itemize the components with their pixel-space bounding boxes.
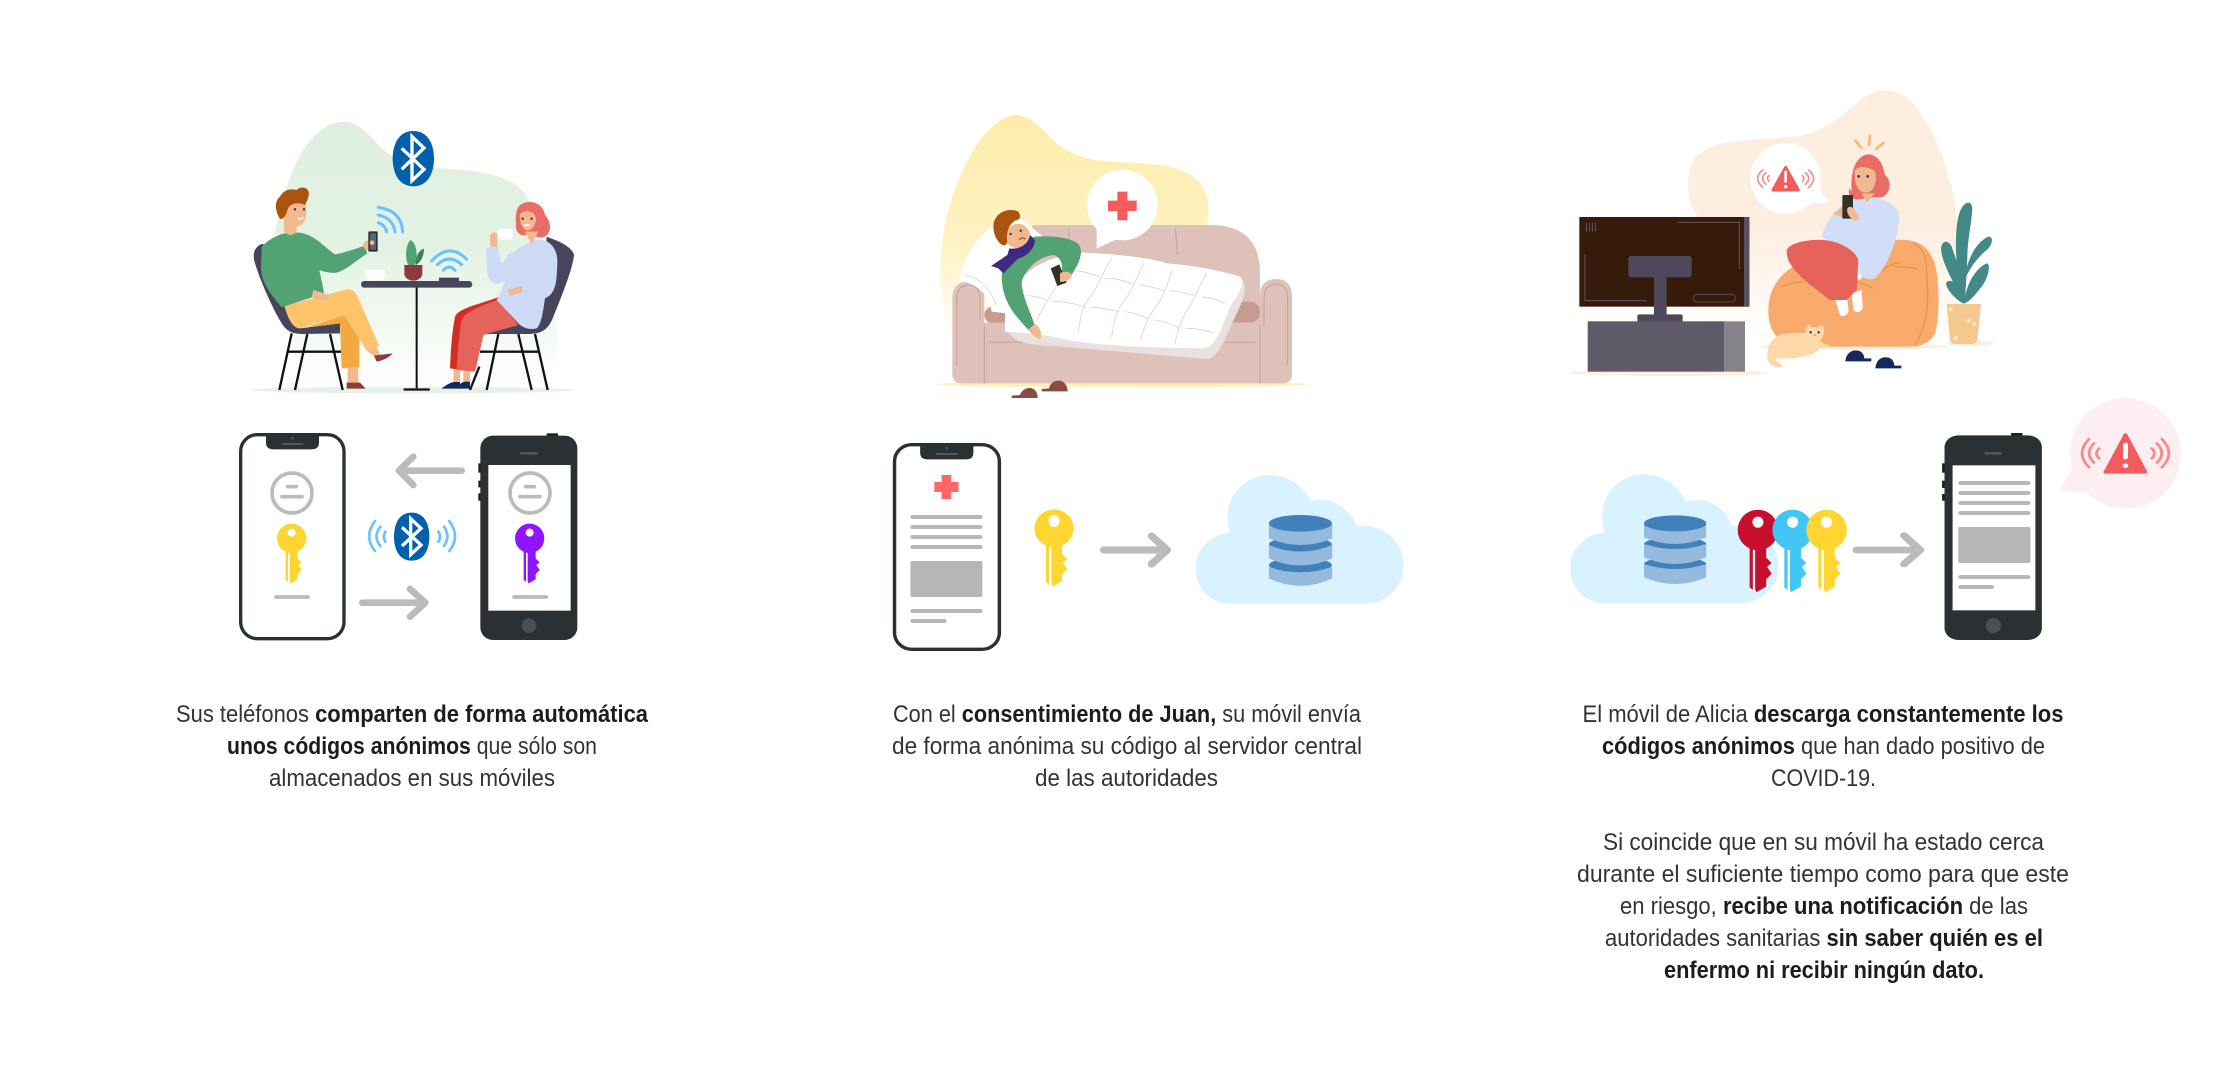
television on stand — [1579, 217, 1749, 372]
cat — [1767, 325, 1829, 367]
icon: bluetooth logo — [393, 131, 434, 186]
table with plant and device — [361, 240, 472, 391]
illustration: sick man on sofa — [937, 115, 1307, 398]
callout: warning bubble — [2059, 398, 2181, 509]
alert sparks — [1855, 136, 1883, 149]
arrow right — [1856, 536, 1920, 564]
cloud database — [1196, 475, 1403, 604]
signal waves — [378, 207, 467, 270]
diagram: keys downloaded from cloud to phone — [1570, 398, 2181, 640]
woman with phone — [1787, 154, 1899, 316]
blanket — [1005, 253, 1245, 359]
illustration: woman on beanbag receives alert — [1570, 90, 1994, 376]
text block: step one: Sus teléfonos comparten de forma automática — [176, 701, 649, 728]
slippers — [1012, 381, 1068, 398]
woman with cup — [442, 202, 574, 390]
text block: step two: de las autoridades — [1035, 765, 1218, 792]
sofa — [952, 225, 1292, 383]
text block: step two — [892, 701, 1362, 792]
text block: step three: COVID-19. — [1771, 765, 1876, 792]
sick man — [991, 210, 1081, 339]
icon: blue key — [1772, 510, 1813, 592]
text block: step two: de forma anónima su código al servidor central — [892, 733, 1362, 760]
text block: step three: Si coincide que en su móvil ha estado cerca — [1603, 829, 2045, 856]
speech bubble: medical cross — [1087, 170, 1158, 248]
text block: step one — [176, 701, 649, 792]
text block: step three: en riesgo, recibe una notificación de las — [1620, 893, 2028, 920]
illustration: friends at a cafe table — [252, 122, 575, 393]
phone with notification — [1942, 433, 2042, 640]
potted plant — [1941, 203, 1992, 344]
icon: bluetooth with signal — [369, 513, 455, 561]
man with phone — [254, 188, 393, 390]
text block: step three: durante el suficiente tiempo como para que este — [1577, 861, 2069, 888]
diagram: phone sends key to cloud — [895, 444, 1403, 649]
slippers — [1845, 350, 1901, 368]
cloud database — [1570, 474, 1778, 603]
arrow left — [399, 457, 462, 485]
icon: red key — [1738, 510, 1778, 592]
phone with purple key — [478, 433, 577, 640]
text block: step three — [1577, 701, 2069, 984]
arrow right — [362, 589, 425, 617]
text block: step three: enfermo ni recibir ningún dato. — [1664, 957, 1984, 984]
icon: yellow key — [1034, 509, 1074, 586]
text block: step three: El móvil de Alicia descarga constantemente los — [1582, 701, 2064, 728]
text block: step three: autoridades sanitarias sin saber quién es el — [1605, 925, 2043, 952]
arrow right — [1104, 536, 1167, 564]
text block: step three: códigos anónimos que han dado positivo de — [1602, 733, 2045, 760]
speech bubble: warning — [1750, 143, 1828, 214]
pillow — [960, 216, 1043, 313]
diagram: two phones exchanging keys — [241, 433, 577, 640]
text block: step one: unos códigos anónimos que sólo son — [227, 733, 597, 760]
phone with yellow key — [241, 435, 344, 639]
text block: step one: almacenados en sus móviles — [269, 765, 555, 792]
text block: step two: Con el consentimiento de Juan, su móvil envía — [893, 701, 1362, 728]
icon: yellow key — [1806, 510, 1847, 592]
beanbag — [1768, 240, 1939, 347]
phone with medical report — [895, 444, 999, 649]
